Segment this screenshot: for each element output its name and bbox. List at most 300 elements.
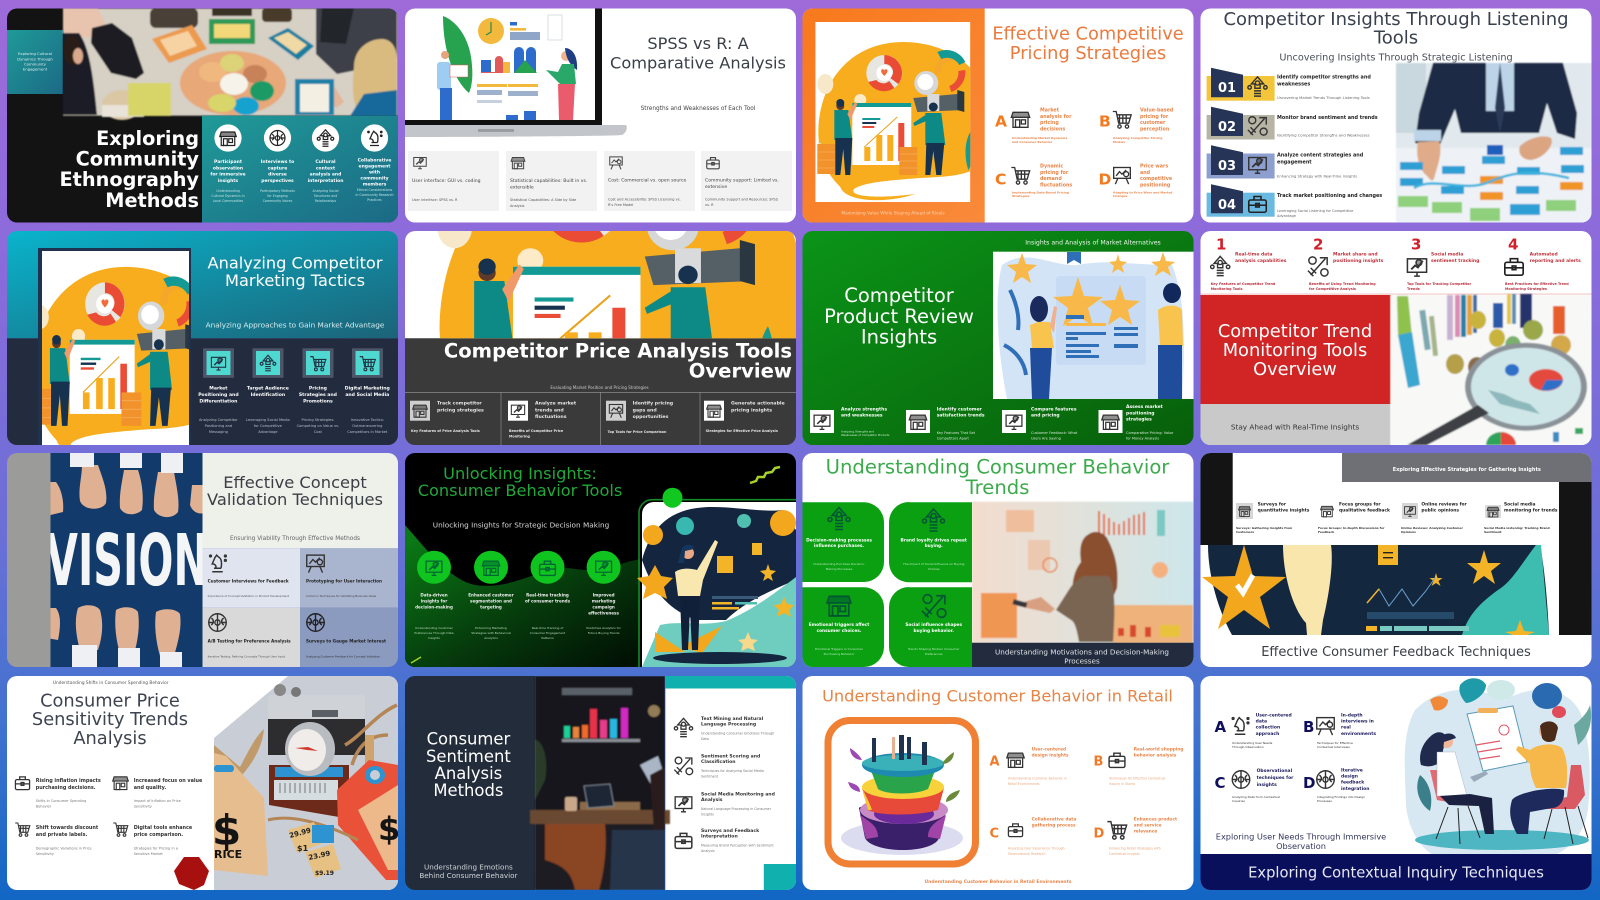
- feature 3: 3: [1411, 236, 1421, 254]
- item D: and service: [1134, 822, 1162, 828]
- step 03: Analyze content strategies and: [1277, 152, 1364, 158]
- method: social monitoring: [675, 792, 775, 816]
- feature 4: reporting and alerts: [1530, 258, 1581, 264]
- item: identify customer satisfaction: satisfaction trends: [937, 413, 985, 419]
- panel: Effective Consumer Feedback Techniques: [1200, 453, 1592, 667]
- item A: A: [990, 755, 1000, 770]
- illustration: analysts enlarged: [405, 231, 796, 338]
- tool: segmentation: Analytics: [484, 636, 498, 640]
- method: text mining: Data: [701, 737, 709, 741]
- method: text mining: Language Processing: [701, 722, 756, 728]
- item: discount shift: Demographic Variations in Price: [36, 846, 92, 850]
- item C: techniques for: [1257, 775, 1294, 781]
- photo: woman viewing data wall: [972, 502, 1194, 643]
- teal lower panel: [202, 116, 398, 223]
- illustration: star feedback scene: [1202, 545, 1549, 635]
- card: statistical capabilities: Analysis: [510, 204, 525, 208]
- title: Consumer Behavior Tools: [418, 481, 622, 500]
- tool: real-time: of consumer trends: [525, 598, 571, 604]
- item B: B: [1303, 718, 1314, 736]
- item: collaborative engagement: engagement: [359, 164, 391, 170]
- card: community support: vs. R: [705, 203, 714, 207]
- item D: design: [1341, 774, 1358, 780]
- subtitle: Observation: [1276, 841, 1326, 851]
- title: Analysis: [435, 764, 502, 783]
- item: interviews: [260, 124, 295, 203]
- item D: feedback: [1341, 780, 1365, 786]
- item: discount shift: Shift towards discount: [36, 825, 99, 831]
- title: Tools: [1373, 28, 1418, 49]
- tool: identify gaps: [606, 400, 673, 434]
- item: rising inflation: purchasing decisions.: [36, 785, 96, 791]
- decoration: red hexagon: [174, 857, 209, 890]
- tool: generate insights: [704, 400, 785, 433]
- card: user interface: User interface: SPSS vs. R: [412, 198, 458, 202]
- item: interviews: diverse: [268, 172, 287, 178]
- feature 3: Social media: [1431, 252, 1463, 258]
- teal accents: [665, 676, 796, 890]
- item: analyze strengths: Weaknesses of Competitor Products: [841, 433, 890, 437]
- item: target audience: for Competitive: [254, 424, 283, 428]
- card: statistical capabilities: extensible: [510, 184, 534, 190]
- item C: Observational: [1257, 768, 1293, 774]
- panel: Competitor Insights Through Listening Tools: [1200, 8, 1592, 223]
- tile: emotional triggers: Emotional triggers affect: [809, 622, 869, 628]
- tool: track competitor: pricing strategies: [437, 407, 484, 413]
- method: surveys and feedback: Interpretation: [701, 834, 738, 840]
- item: pricing strategies: Pricing: [309, 386, 327, 392]
- tool: real-time: Patterns: [541, 636, 554, 640]
- panel: Understanding Consumer Behavior Trends: [802, 453, 1194, 667]
- item B: environments: [1341, 731, 1376, 737]
- tile: social influence: Social influence shapes: [905, 622, 962, 628]
- panel: Competitor Product Review Insights: [802, 231, 1194, 445]
- item: target audience: Identification: [251, 392, 285, 398]
- feature 1: Key Features of Competitor Trend: [1211, 282, 1276, 286]
- title: Overview: [689, 360, 792, 383]
- title: Analysis: [73, 728, 147, 749]
- tool: segmentation: Strategies with Behavioral: [471, 631, 511, 635]
- teal caption block: Dynamics Through: [17, 56, 53, 61]
- item B: behavior analysis: [1134, 752, 1177, 758]
- title: Analyzing Competitor: [208, 254, 383, 272]
- method: text mining: [674, 716, 774, 741]
- subtitle: Analyzing Approaches to Gain Market Advantage: [206, 320, 385, 330]
- item: compare features: Compare features: [1031, 406, 1077, 412]
- teal caption block: Engagement: [23, 67, 48, 72]
- tile: brand loyalty: buying.: [925, 543, 943, 549]
- tile: emotional triggers: [802, 587, 884, 667]
- feature 2: Market share and: [1333, 252, 1378, 258]
- item D: Integrating Findings into Design: [1317, 795, 1365, 799]
- tool: analyze trends: [508, 400, 577, 438]
- item: market positioning: Differentiation: [199, 398, 237, 404]
- subtitle: Strengths and Weaknesses of Each Tool: [641, 106, 756, 112]
- tool: real-time: Real-time Tracking of: [532, 626, 564, 630]
- item: pricing strategies: [297, 348, 339, 434]
- item B: [1303, 712, 1376, 749]
- item A: design insights: [1032, 752, 1069, 758]
- tool: segmentation: Enhanced customer: [468, 592, 514, 598]
- feature 4: Best Practices for Effective Trend: [1505, 282, 1569, 286]
- item: compare features: Users Are Saying: [1031, 436, 1061, 440]
- tile: brand loyalty: Brand loyalty drives repeat: [901, 538, 967, 544]
- cell: prototyping: Common Techniques for Validating Business Ideas: [306, 594, 377, 598]
- title: Community: [76, 148, 199, 171]
- step 04: [1207, 184, 1382, 218]
- item B: Contextual Interviews: [1317, 745, 1350, 749]
- tile: social influence: Preferences: [925, 652, 943, 656]
- tool: data-driven: Preferences Through Data: [414, 631, 454, 635]
- item: collaborative engagement: with: [369, 170, 380, 176]
- illustration frame: [38, 248, 191, 445]
- subtitle: Evaluating Market Position and Pricing Strategies: [550, 385, 649, 390]
- item: identify customer satisfaction: Competitors Apart: [937, 436, 970, 440]
- title: Consumer Price: [40, 691, 180, 712]
- feature 4: Monitoring Strategies: [1505, 287, 1547, 291]
- tool: analyze trends: Analyze market: [535, 400, 577, 406]
- method: online reviews: Opinions: [1401, 530, 1416, 534]
- tool: improved campaign: Predictive Analytics for: [586, 626, 622, 630]
- photo: price tags and camera: RICE: [214, 848, 242, 861]
- tile: emotional triggers: consumer choices.: [817, 628, 862, 634]
- caption bar: Understanding Motivations and Decision-Making: [995, 648, 1169, 656]
- step 04: Leveraging Social Listening for Competitive: [1277, 209, 1353, 213]
- item: digital tools: Sensitive Market: [134, 852, 163, 856]
- title: Understanding Customer Behavior in Retail: [822, 686, 1173, 706]
- tool: segmentation: targeting: [480, 604, 502, 610]
- cell: prototyping: Prototyping for User Interaction: [306, 578, 382, 584]
- panel: Consumer Sentiment Analysis Methods: [405, 676, 796, 890]
- tile: brand loyalty: Choices: [928, 567, 940, 571]
- tile: decision making: Understanding Purchase Decision-: [813, 562, 865, 566]
- feature 4: [1505, 236, 1581, 291]
- gray tagline block: Stay Ahead with Real-Time Insights: [1231, 422, 1359, 432]
- title: Trends: [965, 476, 1029, 499]
- method: social media: monitoring for trends: [1504, 508, 1558, 514]
- top caption: Understanding Shifts in Consumer Spending Behavior: [53, 680, 169, 686]
- title: Validation Techniques: [207, 490, 383, 509]
- item: participant observation: Participant: [214, 159, 243, 165]
- item A: Understanding Customer Behavior in: [1008, 776, 1067, 780]
- tile: decision making: Making Processes: [826, 567, 853, 571]
- item D: Enhancing Retail Strategies with: [1109, 846, 1161, 850]
- method: surveys: Surveys for: [1258, 502, 1287, 508]
- photo: dark cafe with neon chart: [530, 676, 670, 890]
- card: statistical capabilities: [506, 151, 597, 211]
- step 01: weaknesses: [1277, 82, 1310, 88]
- tile: social influence: buying behavior.: [914, 628, 954, 634]
- header text: Insights and Analysis of Market Alternatives: [1025, 240, 1161, 246]
- item D: Contextual Insights: [1109, 852, 1140, 856]
- method: social media: Sentiment: [1484, 530, 1502, 534]
- tagline: Maximizing Value While Staying Ahead of Rivals: [841, 210, 945, 216]
- panel: Competitor Price Analysis Tools Overview: [405, 142, 800, 466]
- item A: User-centered: [1256, 712, 1292, 718]
- item: focus on value: Increased focus on value: [134, 778, 203, 784]
- item: collaborative engagement: Collaborative: [358, 158, 391, 164]
- item A: Market: [1040, 108, 1060, 114]
- title: Effective Competitive: [992, 24, 1184, 44]
- item B: real: [1341, 724, 1351, 730]
- item D: competitive: [1140, 176, 1173, 182]
- red title block: [1200, 295, 1390, 404]
- black side bars: [1200, 453, 1592, 635]
- cell: surveys: [300, 608, 398, 667]
- photo: VISION with hands: [50, 453, 202, 667]
- feature 2: Benefits of Using Trend Monitoring: [1309, 282, 1376, 286]
- method: online reviews: Online reviews for: [1421, 502, 1468, 508]
- decoration: zigzag: [750, 467, 780, 483]
- title: Competitor Insights Through Listening: [1223, 9, 1569, 30]
- card: user interface: [408, 151, 499, 211]
- cell: surveys: Analyzing Customer Feedback for Concept Validation: [306, 655, 380, 659]
- item: collaborative engagement: members: [363, 182, 387, 188]
- item D: Price wars: [1140, 164, 1168, 170]
- title: SPSS vs R: A: [647, 34, 749, 53]
- subtitle: Uncovering Insights Through Strategic Listening: [1279, 52, 1513, 64]
- item A: approach: [1256, 731, 1279, 737]
- item A: [995, 108, 1072, 144]
- item D: Enhances product: [1134, 816, 1177, 822]
- item: interviews: perspectives: [261, 178, 294, 184]
- card: community support: Community support: Limited vs.: [705, 178, 779, 184]
- method: focus groups: Focus Groups: In-Depth Discussions for: [1318, 526, 1385, 530]
- item B: Techniques for Effective: [1316, 741, 1353, 745]
- cell: interviews: Importance of Concept Validation in Product Development: [208, 594, 290, 598]
- tool: data-driven: Insights: [428, 636, 440, 640]
- item: cultural context: interpretation: [308, 178, 343, 184]
- title: Marketing Tactics: [225, 271, 365, 290]
- item: cultural context: [308, 124, 343, 203]
- title: Consumer: [427, 730, 510, 748]
- item: interviews: Community Voices: [263, 199, 293, 203]
- title: Unlocking Insights:: [443, 464, 597, 483]
- step 02: 02: [1218, 120, 1236, 135]
- item B: In-depth: [1341, 712, 1363, 718]
- item: discount shift: Sensitivity: [36, 852, 54, 856]
- panel: Exploring Community Ethnography Methods: [7, 8, 398, 223]
- item: market positioning: Analyzing Competitor: [199, 418, 238, 422]
- item C: [1214, 768, 1294, 803]
- item: digital tools: [113, 823, 193, 856]
- method: social monitoring: Natural Language Processing in Consumer: [701, 807, 772, 811]
- item D: [1303, 768, 1369, 803]
- step 04: Advantage: [1277, 214, 1296, 218]
- title: Understanding Consumer Behavior: [826, 456, 1170, 478]
- panel: Exploring Contextual Inquiry Techniques: [1200, 676, 1592, 890]
- cell: prototyping: [300, 548, 398, 608]
- tool: improved campaign: [586, 551, 622, 635]
- card: community support: Community Support and Resources: SPSS: [705, 198, 779, 202]
- method: social monitoring: Social Media Monitoring and: [701, 792, 775, 798]
- method: focus groups: Focus groups for: [1339, 502, 1381, 508]
- photo: businessman with diagram: [1396, 63, 1592, 223]
- step 03: Enhancing Strategy with Real-Time Insights: [1277, 175, 1357, 179]
- item: interviews: Interviews to: [261, 159, 294, 165]
- tool: identify gaps: Identify pricing: [633, 400, 673, 406]
- method: social media: Social Media Listening: Tracking Brand: [1484, 526, 1550, 530]
- card: user interface: User interface: GUI vs. coding: [412, 178, 481, 184]
- step 02: Monitor brand sentiment and trends: [1277, 115, 1378, 121]
- item C: Inquiries: [1232, 799, 1245, 803]
- method: focus groups: Feedback: [1318, 530, 1335, 534]
- item: digital marketing: Digital Marketing: [345, 386, 390, 392]
- title: Sentiment: [426, 747, 511, 766]
- feature 2: 2: [1313, 236, 1323, 254]
- item B: Techniques for Effective Contextual: [1108, 776, 1165, 780]
- panel: Competitor Trend Monitoring Tools Overview: [1200, 231, 1592, 445]
- panel: Unlocking Insights Consumer Behavior Tools: [405, 453, 796, 667]
- tool: generate insights: Generate actionable: [731, 400, 785, 406]
- tile: social influence: Trends Shaping Modern Consumer: [907, 647, 960, 651]
- tile: emotional triggers: Emotional Triggers in Consumer: [815, 647, 864, 651]
- subtitle: Behind Consumer Behavior: [419, 871, 518, 880]
- tool: data-driven: [414, 551, 454, 640]
- method: sentiment scoring: Sentiment Scoring and: [701, 754, 760, 760]
- item: rising inflation: Shifts in Consumer Spending: [36, 799, 86, 803]
- item A: pricing: [1040, 120, 1059, 126]
- tool: real-time: [525, 551, 571, 640]
- tool: segmentation: Enhancing Marketing: [475, 626, 507, 630]
- item: target audience: [246, 348, 290, 434]
- item: digital marketing: Competitors in Market: [347, 430, 388, 434]
- item D: integration: [1341, 786, 1369, 792]
- item D: Iterative: [1341, 768, 1363, 774]
- title: Product Review: [824, 305, 974, 328]
- photo: price tags and camera: $1: [297, 844, 309, 853]
- item C: Analyzing Data from Contextual: [1232, 795, 1280, 799]
- method: online reviews: public opinions: [1421, 508, 1459, 514]
- item: focus on value: Impact of Inflation on Price: [134, 799, 181, 803]
- panel: Analyzing Competitor Marketing Tactics: [7, 231, 398, 458]
- method: text mining: Text Mining and Natural: [701, 716, 764, 722]
- subtitle: Exploring User Needs Through Immersive: [1216, 832, 1386, 842]
- item A: A: [1214, 718, 1226, 736]
- item: assess positioning: positioning: [1126, 410, 1154, 416]
- item A: analysis for: [1040, 114, 1072, 120]
- subtitle: Understanding Emotions: [424, 862, 513, 872]
- title: Ethnography: [59, 168, 199, 191]
- feature 4: 4: [1508, 236, 1518, 254]
- illustration: layered funnel in frame: [828, 720, 976, 864]
- tool: analyze trends: fluctuations: [535, 414, 567, 420]
- title: Competitor Price Analysis Tools: [444, 340, 792, 363]
- tool: generate insights: pricing insights: [731, 407, 772, 413]
- item C: Analyzing User Experience Through: [1008, 846, 1065, 850]
- item: interviews: capture: [268, 165, 287, 171]
- tool: analyze trends: Monitoring: [509, 434, 530, 438]
- item D: D: [1098, 170, 1112, 188]
- feature 1: [1211, 236, 1287, 291]
- caption bar: [972, 643, 1194, 667]
- feature 1: Monitoring Tools: [1211, 287, 1242, 291]
- item A: User-centered: [1032, 746, 1066, 752]
- cell: A/B testing: A/B Testing for Preference Analysis: [208, 639, 291, 644]
- item C: Dynamic: [1040, 164, 1063, 170]
- item B: perception: [1140, 126, 1170, 132]
- title: Sensitivity Trends: [32, 709, 188, 730]
- feature 1: Real-time data: [1235, 252, 1272, 258]
- item C: C: [1214, 774, 1226, 792]
- method: text mining: Understanding Consumer Emotions Through: [701, 732, 774, 736]
- item: compare features: and pricing: [1031, 413, 1060, 419]
- photo: price tags and camera: 29.99: [288, 826, 312, 840]
- item: digital tools: Digital tools enhance: [134, 825, 193, 831]
- item: pricing strategies: Strategies and: [299, 392, 337, 398]
- gray tagline block: [1200, 404, 1390, 445]
- tool: improved campaign: Future Buying Trends: [588, 631, 620, 635]
- tool: data-driven: Understanding Customer: [415, 626, 454, 630]
- item: digital marketing: Innovative Tactics:: [351, 418, 384, 422]
- item: participant observation: [210, 124, 246, 203]
- tile: decision making: influence purchases.: [814, 543, 864, 549]
- header bar: Exploring Effective Strategies for Gathering Insights: [1393, 467, 1541, 473]
- item D: [1098, 164, 1173, 198]
- item: collaborative engagement: Practices: [367, 198, 382, 202]
- item C: [995, 164, 1072, 198]
- item: cultural context: Cultural: [315, 159, 336, 165]
- item: pricing strategies: Cost: [314, 430, 322, 434]
- item: digital marketing: Outmaneuvering: [352, 424, 382, 428]
- item C: pricing for: [1040, 170, 1069, 176]
- item D: relevance: [1134, 828, 1157, 834]
- card: cost: [604, 151, 695, 211]
- item B: Inquiry in Stores: [1109, 782, 1135, 786]
- tool: generate insights: Strategies for Effective Price Analysis: [706, 429, 778, 433]
- item C: C: [995, 170, 1006, 188]
- item A: Understanding User Needs: [1232, 741, 1273, 745]
- panel: Consumer Price Sensitivity Trends Analysis: [7, 676, 400, 890]
- item: market positioning: [198, 348, 239, 434]
- item: participant observation: Local Communities: [213, 199, 244, 203]
- tool: track competitor: [410, 400, 484, 433]
- item: identify customer satisfaction: Identify customer: [937, 406, 983, 412]
- feature 3: Trends: [1407, 287, 1420, 291]
- photo: price tags and camera: $: [378, 810, 400, 848]
- feature 2: positioning insights: [1333, 258, 1384, 264]
- feature 4: Automated: [1530, 252, 1558, 258]
- item: target audience: Advantage: [258, 430, 278, 434]
- item C: Collaborative data: [1032, 816, 1076, 822]
- tool: improved campaign: effectiveness: [588, 610, 619, 616]
- item: discount shift: and private labels.: [36, 832, 88, 838]
- item B: Real-world shopping: [1134, 746, 1183, 752]
- item A: [990, 746, 1069, 786]
- title: Exploring: [96, 127, 199, 150]
- feature 3: Top Tools for Tracking Competitor: [1407, 282, 1471, 286]
- item: rising inflation: [15, 777, 101, 808]
- step 03: 03: [1218, 159, 1236, 174]
- item D: positioning: [1140, 182, 1171, 188]
- title: Methods: [105, 189, 199, 212]
- item: pricing strategies: Promotions: [303, 398, 333, 404]
- item: pricing strategies: Pricing Strategies:: [301, 418, 334, 422]
- item: collaborative engagement: [355, 124, 394, 202]
- step 04: Track market positioning and changes: [1277, 193, 1382, 199]
- feature 1: analysis capabilities: [1235, 258, 1287, 264]
- tool: data-driven: Data-driven: [420, 592, 448, 598]
- tool: real-time: Consumer Engagement: [530, 631, 566, 635]
- panel: Effective Competitive Pricing Strategies: [802, 8, 1194, 222]
- subtitle: Ensuring Viability Through Effective Methods: [230, 536, 360, 542]
- tool: data-driven: decision-making: [415, 604, 453, 610]
- photo: price tags and camera: $: [212, 806, 241, 855]
- item C: fluctuations: [1040, 182, 1072, 188]
- item D: Processes: [1317, 799, 1332, 803]
- method: surveys and feedback: Surveys and Feedback: [701, 828, 760, 834]
- method: social monitoring: Analysis: [701, 797, 723, 803]
